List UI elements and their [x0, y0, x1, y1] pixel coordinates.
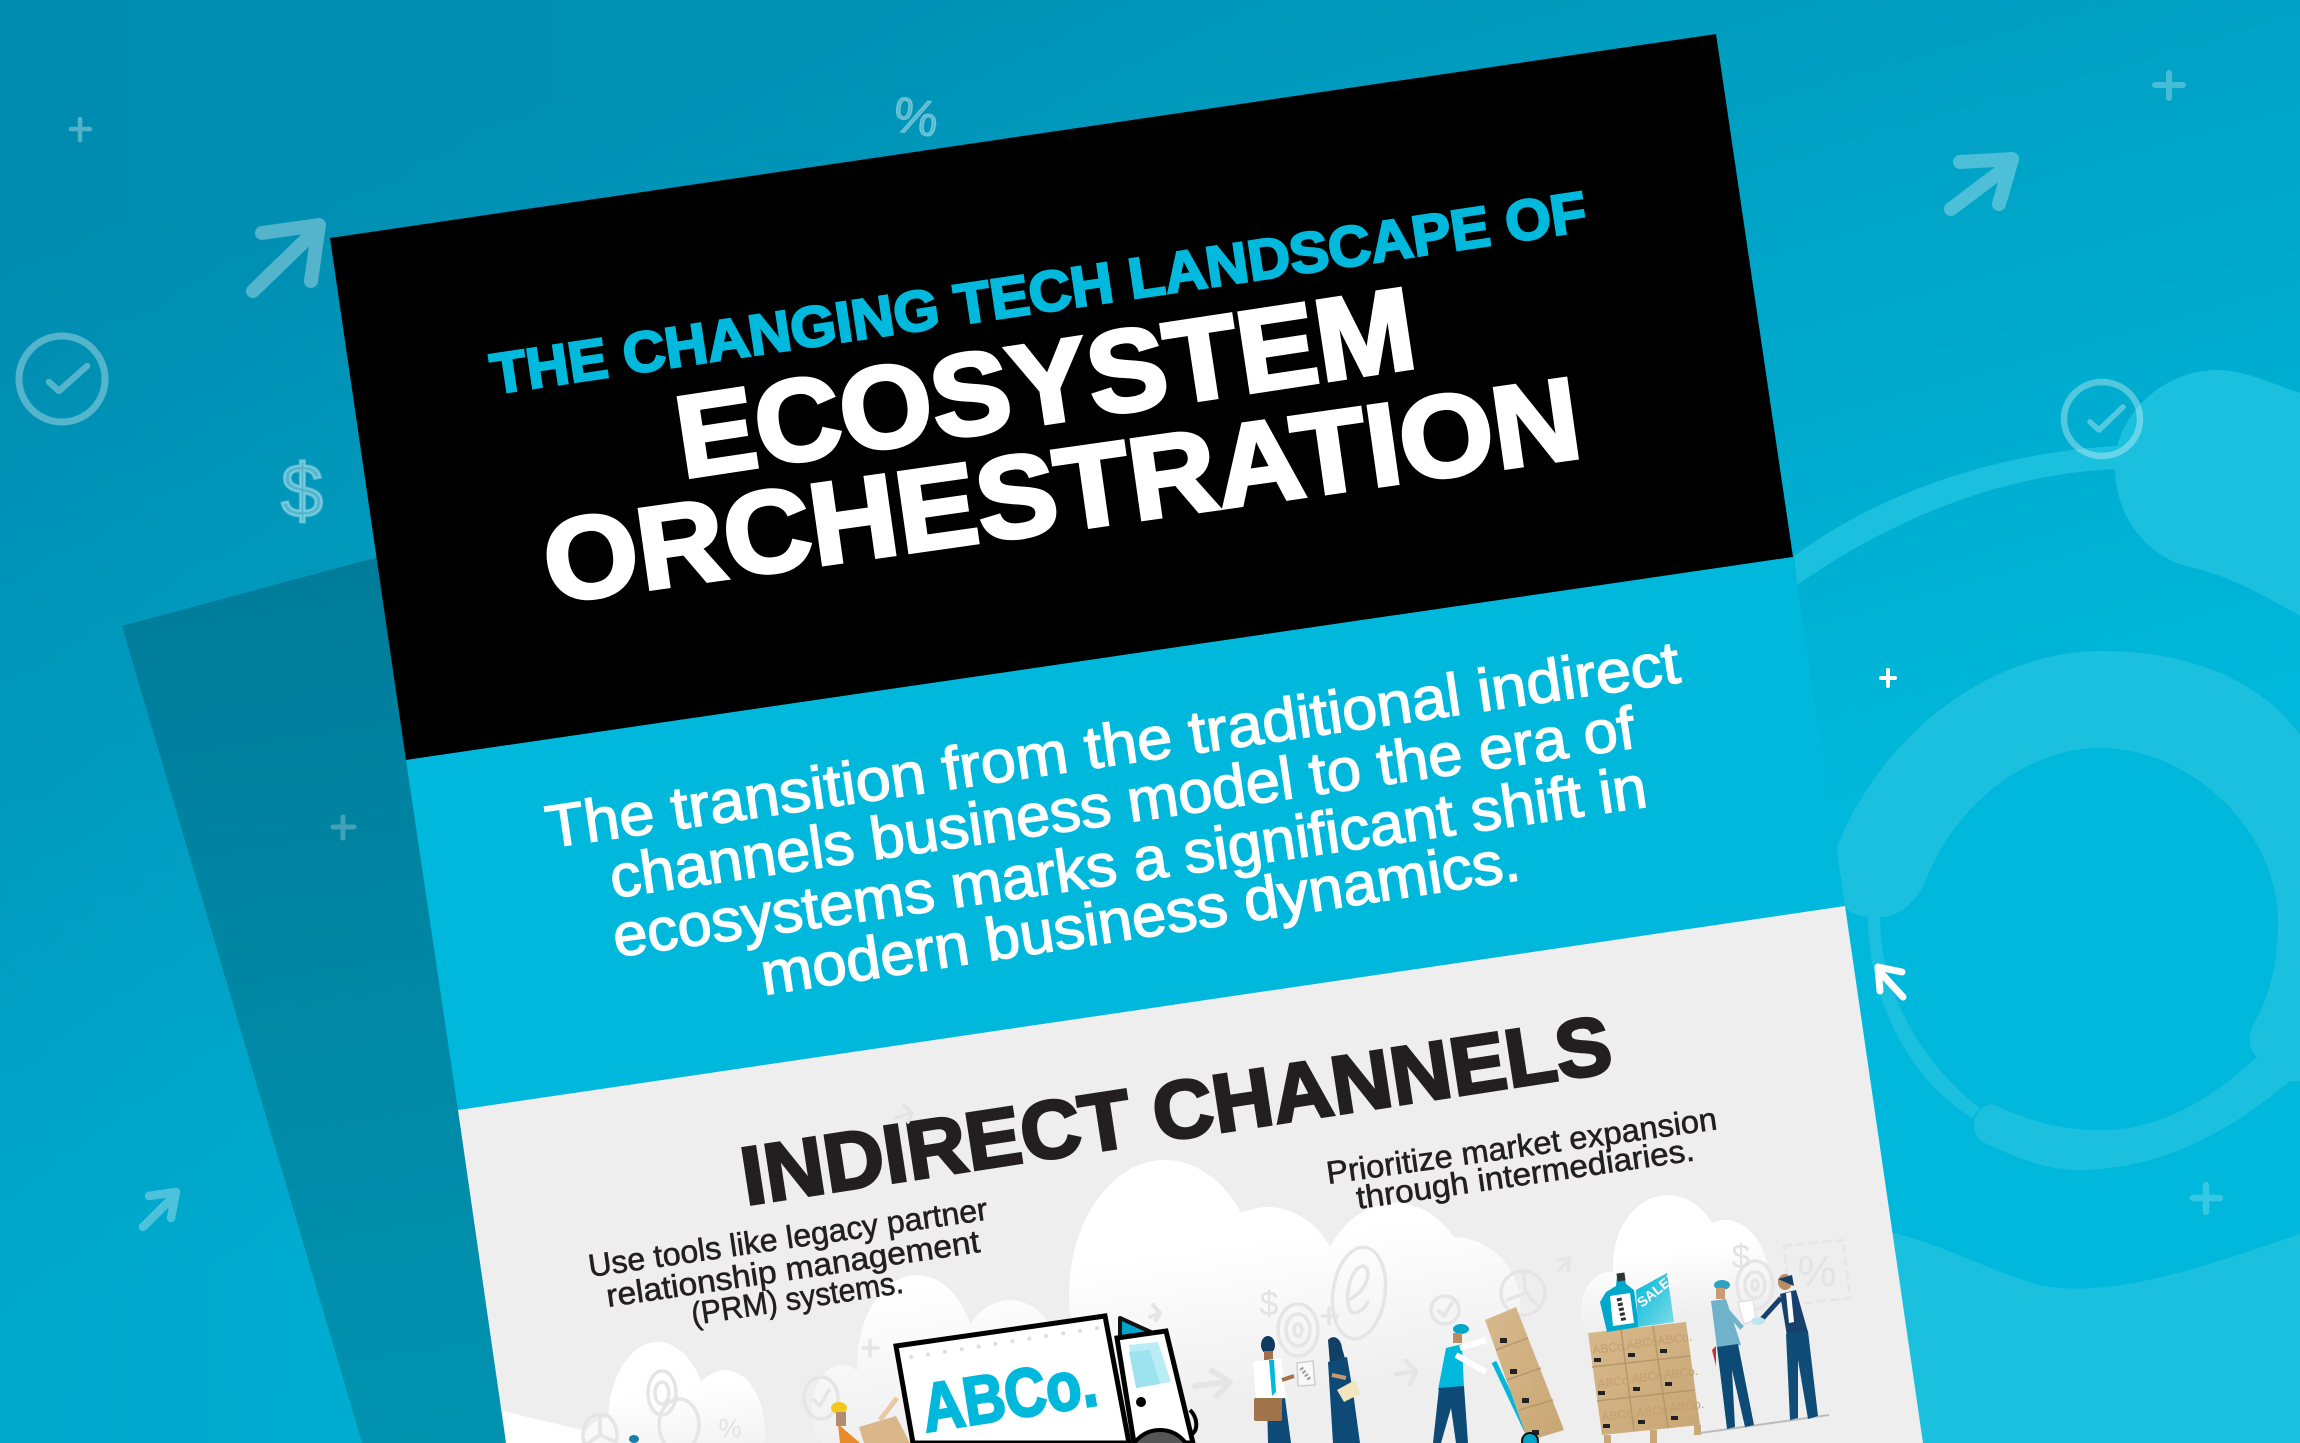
heading: INDIRECT CHANNELS	[735, 999, 1618, 1223]
title line 1: ECOSYSTEM	[667, 263, 1423, 503]
pallet box logos: ABCo.	[1631, 1368, 1667, 1386]
right description: Prioritize market expansion	[1324, 1100, 1719, 1191]
icon: white plus	[1881, 670, 1895, 686]
illustration: pallet of boxes	[1588, 1271, 1829, 1443]
stacked boxes	[1485, 1307, 1564, 1441]
pallet boxes	[1588, 1322, 1700, 1435]
title kicker: THE CHANGING TECH LANDSCAPE OF	[486, 180, 1591, 407]
hand truck wheel	[1522, 1433, 1538, 1443]
illustration: person with bag	[1253, 1336, 1315, 1443]
intro text: channels business model to the era of	[605, 694, 1639, 911]
truck dots	[911, 1328, 1098, 1357]
intro text	[541, 629, 1684, 1008]
icon: white arrow	[1878, 967, 1903, 997]
pallet box logos: ABCo.	[1626, 1334, 1662, 1352]
faint symbols: $	[1260, 1285, 1279, 1323]
icon: arrow, upper right	[1951, 159, 2012, 209]
icon: plus, upper right	[2155, 73, 2183, 98]
pallet box logos: ABCo.	[1636, 1402, 1672, 1420]
background headset silhouette	[1794, 370, 2300, 1443]
left description: relationship management	[604, 1223, 982, 1314]
right description: through intermediaries.	[1354, 1132, 1697, 1216]
faint symbols	[718, 1238, 1837, 1443]
sale sign	[1636, 1273, 1674, 1327]
truck door handle	[1136, 1397, 1146, 1407]
panel: black title header	[330, 34, 1793, 760]
illustration: person in light blue shirt	[1711, 1280, 1756, 1429]
truck wheel	[1128, 1430, 1192, 1443]
left description: Use tools like legacy partner	[586, 1191, 990, 1284]
pallet box logos: ABCo.	[1601, 1406, 1637, 1424]
illustration: person in navy jacket	[1751, 1274, 1818, 1420]
pallet labels	[1594, 1349, 1678, 1428]
truck headlight arc	[1190, 1410, 1196, 1434]
pallet box logos: ABCo.	[1657, 1330, 1693, 1348]
oil bottle	[1600, 1275, 1639, 1332]
left description: (PRM) systems.	[689, 1264, 906, 1332]
truck cargo box	[896, 1316, 1129, 1443]
pallet box logos: ABCo.	[1592, 1339, 1628, 1357]
intro text: modern business dynamics.	[756, 826, 1524, 1008]
illustration: pallet of boxes: SALE!	[1634, 1271, 1677, 1310]
illustration: small figure head	[629, 1435, 639, 1443]
faint background icons	[583, 1105, 1850, 1443]
faint symbols: %	[1797, 1247, 1837, 1296]
icon: arrow, upper left	[253, 225, 319, 291]
icon: arrow, lower left	[143, 1192, 176, 1227]
truck window	[1129, 1342, 1171, 1388]
ground shadow	[1700, 1415, 1829, 1433]
illustration: yellow-hat worker carrying box	[831, 1398, 910, 1443]
left description	[586, 1191, 990, 1332]
pallet box logos: ABCo.	[1663, 1364, 1699, 1382]
pallet box logos: ABCo.	[1669, 1397, 1705, 1415]
illustration: delivery truck	[896, 1316, 1196, 1443]
faint symbols: $	[1732, 1238, 1751, 1276]
panel: indirect channels	[458, 906, 1923, 1443]
hand truck rail	[1494, 1362, 1530, 1438]
icon: plus on shadow	[333, 817, 354, 838]
icon: check circle, left	[19, 336, 105, 422]
title line 2: ORCHESTRATION	[535, 353, 1588, 628]
pallet box logos: ABCo.	[1597, 1373, 1633, 1391]
icon: plus, lower right	[2193, 1185, 2220, 1212]
illustration: worker with hand truck	[1433, 1307, 1564, 1443]
pallet base	[1604, 1425, 1701, 1443]
intro text: ecosystems marks a significant shift in	[608, 753, 1651, 970]
icon: dollar sign: $	[281, 449, 323, 534]
panel: cyan introduction	[406, 557, 1845, 1110]
icon: check circle, right	[2064, 382, 2140, 456]
faint symbols: %	[718, 1413, 742, 1443]
illustration: woman with folder	[1328, 1337, 1360, 1443]
icon: plus, upper left	[71, 119, 90, 140]
icon: percent sign, top: %	[890, 86, 942, 148]
truck cab	[1117, 1331, 1193, 1443]
shadow panel behind the page	[122, 551, 520, 1443]
pallet box logos	[1592, 1330, 1705, 1424]
clouds	[503, 1160, 1769, 1443]
intro text: The transition from the traditional indirect	[541, 629, 1684, 861]
truck mirror	[1120, 1318, 1153, 1338]
